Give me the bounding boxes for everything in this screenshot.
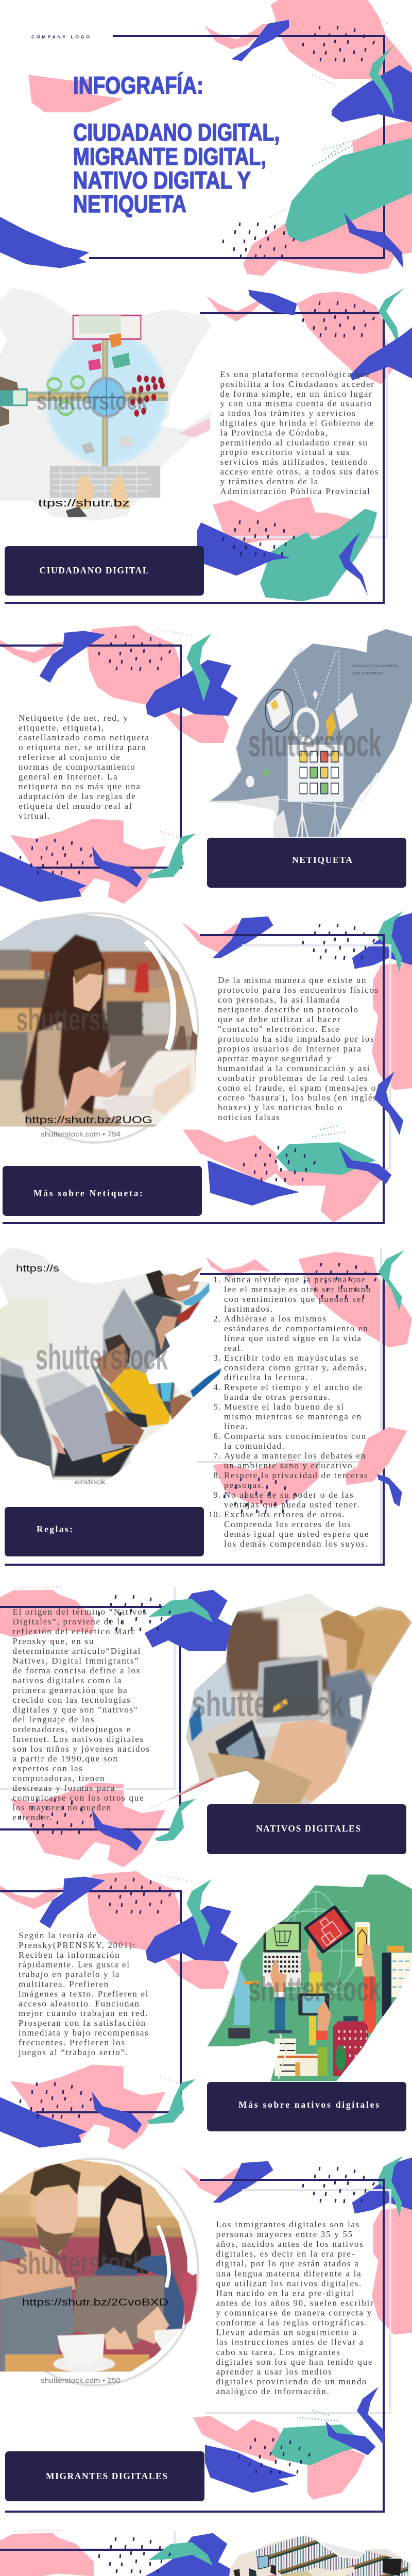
list text: Comparta sus conocimientos con [224,1431,367,1441]
description text: de forma simple, en un único lugar [220,389,372,399]
description text: Reciben la información [19,1950,120,1960]
description text: humanidad a la comunicación y así [218,1063,370,1073]
panel: reglas [0,1245,412,1565]
description text: y comunicarse de manera correcta y [216,2308,372,2318]
banner: reglas: Reglas: [37,1524,73,1534]
description text: como el fraude, el spam (mensajes o [218,1083,376,1093]
description text: digitales y que son "nativos" [12,1705,139,1715]
description text: acceso aleatorio. Funcionan [19,1998,140,2008]
list text: Comprenda los errores de los [224,1519,351,1529]
list text: los demás comprendan los suyos. [224,1539,368,1549]
description text: imágenes a texto. Prefieren el [19,1989,149,1998]
panel: más sobre netiqueta [0,910,412,1223]
description text: Es una plataforma tecnológica que [220,369,370,379]
description text: Digitales”, proviene de la [12,1617,125,1626]
description text: "contacto" electrónico. Este [218,1024,340,1034]
description text: digitales que brinda el Gobierno de [220,418,374,428]
brush decorations: blue and teal [0,20,412,268]
frame [5,2180,384,2512]
description text: etiqueta del mundo real al [19,801,132,811]
description text: juegos al “trabajo serio”. [18,2047,129,2057]
description text: noticias falsas [218,1112,281,1122]
banner: nativos digitales: NATIVOS DIGITALES [256,1823,360,1834]
dot marks [20,1595,170,1835]
illustration: product development [208,629,412,837]
illustration: online shopping [205,1871,412,2084]
stock credit: shutterstock.com • 250 [41,2376,121,2384]
dot marks [20,1878,170,2119]
banner: ciudadano digital [5,546,204,596]
panel: más sobre migrantes digitales [0,2530,412,2576]
description text: expertos con las [12,1764,83,1773]
list text: demás igual que usted espera que [224,1529,369,1539]
description text: que se debe utilizar al hacer [218,1014,341,1024]
list numbers: 4. [213,1382,221,1392]
list text: ventajas que pueda usted tener. [224,1500,360,1510]
photo: network illustration [0,288,213,520]
list text: Muestre el lado bueno de sí [224,1402,345,1412]
description text: destrezas y formas para [12,1783,115,1793]
description text: Según la teoría de [19,1930,97,1940]
description text: a partir de 1990,que son [12,1754,118,1764]
url: ttps://shutr.bz [38,498,130,509]
brushes top [181,911,412,1090]
frame shadow [197,1248,384,1565]
stock credit: shutterstock.com • 794 [41,1130,121,1138]
panel: más sobre nativos digitales [0,1871,412,2149]
list text: No abuse de su poder o de las [224,1490,354,1500]
description text: Prensky que, en su [12,1636,94,1646]
brush pink bottom [10,1783,165,1867]
list text: lastimados. [224,1304,273,1314]
list numbers: 8. [213,1470,221,1480]
description text: netiquette describe un protocolo [218,1005,359,1014]
frame shadow [0,1587,175,1789]
description text: y trámites dentro de la [220,477,319,486]
photo: children in computer library [229,2535,411,2576]
stock credit: erstock [75,1478,106,1486]
description text: comunicarse con los otros que [12,1793,144,1803]
title: NETIQUETA [73,190,186,217]
list text: la comunidad. [224,1441,285,1451]
illustration caption line 2: AND TEAMWORK [352,671,384,675]
banner: más sobre netiqueta [3,1166,202,1216]
description text: adaptación de las reglas de [19,791,136,801]
banner: migrantes digitales [5,2451,204,2501]
list text: mismo mientras se mantenga en [224,1412,362,1421]
list numbers: 5. [213,1402,221,1412]
brushes blue and teal [145,2533,231,2576]
brushes blue and teal [0,1877,238,2148]
list text: personas. [224,1480,265,1490]
photo: woman with phone [0,910,202,1143]
watermark: shutterstock [16,2246,145,2281]
dot marks [244,924,374,1182]
description text: Llevan además un seguimiento a [216,2328,357,2337]
list numbers: 6. [213,1431,221,1441]
panel: netiqueta [0,625,412,904]
description text: digital, por lo que están atados a [216,2259,359,2268]
description text: acceso entre otros, a todos sus datos [220,467,379,477]
description text: inmediata y bajo recompensas [19,2028,149,2038]
list text: Adhiérase a los mismos [224,1314,327,1324]
description text: personas mayores entre 35 y 55 [216,2229,353,2239]
description text: multitarea. Prefieren [19,1979,109,1989]
banner: migrantes digitales: MIGRANTES DIGITALES [46,2471,167,2481]
description text: general en Internet. La [19,772,118,782]
description text: trabajo en paralelo y la [19,1970,120,1979]
list text: Nunca olvide que la persona que [224,1275,366,1284]
brushes pink [207,292,405,560]
description text: aprender a usar los medios [216,2367,333,2377]
description text: antes de los años 90, suelen escribir [216,2298,374,2308]
brushes top [181,2156,412,2334]
frame [5,1274,384,1565]
description text: y con una misma cuenta de usuario [220,399,372,409]
description text: que utilizan los nativos digitales. [216,2278,362,2288]
description text: frecuentes. Prefieren los [19,2038,126,2047]
frame [0,1891,181,2112]
brushes blue and teal [145,1590,231,1651]
dot marks [20,2537,170,2576]
brushes bottom [193,2387,385,2500]
title: CIUDADANO DIGITAL, [73,118,280,146]
description text: Netiquette (de net, red, y [19,713,129,723]
brushes blue and teal [197,288,412,601]
panel: introduction with title [0,0,412,276]
frame [0,1607,180,1829]
watermark: shutterstock [192,1684,344,1724]
description text: las instrucciones antes de llevar a [216,2337,364,2347]
description text: primera generación que ha [12,1685,128,1695]
list text: considera como gritar y, además, [224,1363,368,1372]
brush pink top [0,2530,94,2576]
description text: de forma concisa define a los [12,1666,141,1675]
list text: real. [224,1343,244,1353]
url: https://shutr.bz/2UOG [25,1115,152,1126]
title: INFOGRAFÍA: [73,72,203,99]
description text: Natives, Digital Immigrants” [12,1656,139,1666]
description text: Han nacido en la era pre-digital [216,2288,355,2298]
description text: correo 'basura'), los bulos (en inglés [218,1093,377,1103]
list text: línea. [224,1421,249,1431]
list numbers: 3. [213,1353,221,1363]
frame [3,935,384,1223]
list text: Respete la privacidad de terceras [224,1470,368,1480]
description text: Los inmigrantes digitales son las [216,2219,360,2229]
description text: del lenguaje de los [12,1715,95,1724]
description text: digitales son los que han tenido que [216,2357,373,2367]
description text: Administración Pública Provincial [220,486,370,496]
frame shadow [206,340,387,537]
brush pink top [0,1587,94,1641]
description text: años, nacidos antes de los nativos [216,2239,364,2249]
description text: mejor cuando trabajan en red. [19,2008,148,2018]
description text: determinante artículo“Digital [12,1646,141,1656]
frame [5,313,384,603]
panel: ciudadano digital [0,288,412,603]
description text: De la misma manera que existe un [218,975,367,985]
list text: Excuse los errores de otros. [224,1510,346,1519]
banner: más sobre nativos digitales [207,2082,406,2131]
list text: Ayude a mantener los debates en [224,1451,366,1461]
list numbers: 2. [213,1314,221,1324]
description text: a todos los trámites y servicios [220,409,356,418]
description text: son los niños y jóvenes nacidos [12,1744,150,1754]
list text: dificulta la lectura. [224,1372,308,1382]
brushes bottom [183,1126,391,1223]
list numbers: 1. [213,1275,221,1284]
banner: netiqueta [207,838,406,888]
brushes blue and teal [0,631,238,902]
list numbers: 9. [213,1490,221,1500]
url: https://shutr.bz/2CvoBXD [22,2297,168,2308]
description text: etiquette, etiqueta), [19,723,105,733]
description text: normas de comportamiento [19,762,135,772]
list numbers: 7. [213,1451,221,1461]
description text: netiqueta no es más que una [19,782,141,791]
description text: reflexión del ecléctico Marc [12,1626,136,1636]
description text: Internet. Los nativos digitales [12,1734,144,1744]
description text: permitiendo al ciudadano crear su [220,437,368,447]
photo: children with tablet in car [0,1245,228,1485]
panel: migrantes digitales [0,2156,412,2512]
dot marks [223,301,374,556]
description text: protocolo ha sido impulsado por los [218,1034,374,1044]
description text: castellanizado como netiqueta [19,733,150,742]
list text: línea que usted sigue en la vida [224,1333,362,1343]
list numbers: 10. [209,1510,221,1519]
list text: Escribir todo en mayúsculas se [224,1353,359,1363]
url: https://s [16,1263,59,1274]
frame shadow [206,2190,390,2413]
dot marks [223,26,374,259]
list text: lee el mensaje es otro ser humano [224,1284,371,1294]
frame [0,2550,180,2576]
watermark: shutterstock [16,1002,145,1038]
description text: Prensky(PRENSKY, 2001): [19,1940,136,1950]
banner: reglas [5,1507,204,1556]
brushes pink [207,1252,412,1506]
description text: cabo su tarea. Los migrantes [216,2347,341,2357]
description text: Prosperan con la satisfacción [19,2018,146,2028]
frame shadow [0,2531,175,2576]
description text: El origen del término “Nativos [12,1607,147,1617]
list text: Respete el tiempo y el ancho de [224,1382,363,1392]
watermark: shutterstock [37,386,147,415]
description text: nativos digitales como la [12,1675,122,1685]
dot marks [238,2167,374,2474]
description text: protocolo para los encuentros físicos [218,985,379,995]
description text: conforme a las reglas ortográficas. [216,2318,368,2328]
description text: ordenadores, videojuegos e [12,1724,131,1734]
frame shadow [242,945,390,1168]
title [73,72,280,217]
description text: servicios más utilizados, teniendo [220,457,368,467]
photo: couple with tablet [0,2157,202,2385]
description text: referirse al conjunto de [19,752,121,762]
brushes pink [0,625,229,904]
description text: virtual. [19,811,50,821]
frame [0,646,181,868]
description text: digitales proviniendo de un mundo [216,2377,367,2386]
swoosh [374,1072,403,1135]
description text: o etiqueta net, se utiliza para [19,742,146,752]
description text: rápidamente. Les gusta el [19,1960,130,1970]
frame [89,36,384,258]
description text: una lengua materna diferente a la [216,2268,362,2278]
banner: más sobre nativos digitales: Más sobre nativos digitales [238,2099,379,2110]
brushes top [344,1250,407,1506]
description text: crecido con las tecnologías [12,1695,131,1705]
dot marks [224,1263,376,1514]
description text: entender. [12,1812,53,1822]
description text: posibilita a los Ciudadanos acceder [220,379,375,389]
illustration caption: PRODUCT DEVELOPMENT [352,664,398,668]
photo: students with laptop [121,1590,412,1825]
banner: más sobre netiqueta: Más sobre Netiqueta: [33,1188,143,1198]
rules list [209,1275,371,1549]
description text: computadoras, tienen [12,1773,105,1783]
watermark: shutterstock [36,1337,168,1377]
panel: nativos digitales [0,1587,412,1867]
description text: con personas, la así llamada [218,995,340,1005]
description text: los mayores no pueden [12,1803,112,1812]
list text: estándares de comportamiento en [224,1324,368,1333]
title: NATIVO DIGITAL Y [73,166,251,194]
banner: netiqueta: NETIQUETA [292,855,352,865]
description text: digitales, es decir en la era pre- [216,2249,355,2259]
banner: ciudadano digital: CIUDADANO DIGITAL [39,565,148,575]
description text: combatir problemas de la red tales [218,1073,368,1083]
dot marks [20,635,170,875]
list text: un ambiente sano y educativo. [224,1461,356,1470]
list text: banda de otras personas. [224,1392,331,1402]
description text: la Provincia de Córdoba, [220,428,329,437]
brush decorations: pink [28,0,412,276]
list text: con sentimientos que pueden ser [224,1294,365,1304]
description text: propios usuarios de Internet para [218,1044,362,1054]
title: MIGRANTE DIGITAL, [73,143,266,170]
description text: hoaxes) y las noticias bulo o [218,1103,343,1112]
description text: propio escritorio virtual a sus [220,447,350,457]
description text: aportar mayor seguridad y [218,1054,332,1063]
brushes pink [0,1871,229,2149]
banner: nativos digitales [207,1804,406,1854]
company logo: COMPANY LOGO [31,34,90,39]
description text: analógico de información. [216,2386,330,2396]
brush bottom swooshes [92,1799,196,1851]
